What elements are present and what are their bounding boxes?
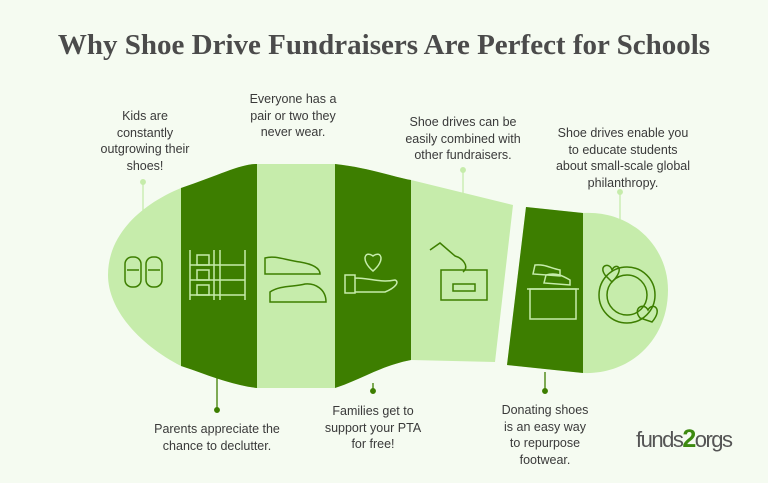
icon: sneakers xyxy=(265,257,326,302)
label: everyone has a pair xyxy=(250,92,336,139)
label: kids outgrowing: Kids are xyxy=(122,109,168,123)
label: combined fundraisers: other fundraisers. xyxy=(414,148,512,162)
shoe sole graphic xyxy=(108,164,668,413)
label: educate students: Shoe drives enable you xyxy=(558,126,688,140)
title: Why Shoe Drive Fundraisers Are Perfect for Schools xyxy=(58,29,710,61)
label: families support PTA: Families get to xyxy=(332,404,414,418)
label: educate students xyxy=(556,126,690,190)
label: parents declutter: Parents appreciate the xyxy=(154,422,280,436)
label: combined fundraisers xyxy=(405,115,521,162)
label: families support PTA: support your PTA xyxy=(325,420,421,434)
label: educate students: about small-scale global xyxy=(556,159,690,173)
label: donating shoes: footwear. xyxy=(520,452,570,466)
label: everyone has a pair: pair or two they xyxy=(250,108,336,122)
icon: globe with hearts xyxy=(599,265,657,323)
label: kids outgrowing: outgrowing their xyxy=(101,142,189,156)
label: donating shoes: is an easy way xyxy=(504,420,586,434)
label: combined fundraisers: easily combined with xyxy=(405,132,521,146)
icon: hand with heart xyxy=(345,254,397,293)
label: parents declutter xyxy=(154,422,280,452)
logo: funds2orgs xyxy=(636,425,732,453)
label: kids outgrowing: shoes! xyxy=(127,158,163,172)
label: kids outgrowing xyxy=(101,109,190,172)
label: parents declutter: chance to declutter. xyxy=(163,438,271,452)
label: donating shoes: to repurpose xyxy=(510,436,580,450)
label: everyone has a pair: Everyone has a xyxy=(250,92,336,106)
label: kids outgrowing: constantly xyxy=(117,126,173,140)
label: donating shoes: Donating shoes xyxy=(502,403,588,417)
label: combined fundraisers: Shoe drives can be xyxy=(409,115,516,129)
label: families support PTA: for free! xyxy=(351,437,395,451)
label: educate students: to educate students xyxy=(568,142,678,156)
label: educate students: philanthropy. xyxy=(588,176,658,190)
icon: donation box xyxy=(430,243,487,300)
label: everyone has a pair: never wear. xyxy=(261,125,325,139)
icon: shoes in box xyxy=(527,265,579,319)
icon: shelves xyxy=(190,250,245,300)
connectors xyxy=(141,164,622,220)
label: families support PTA xyxy=(325,404,422,451)
label: donating shoes xyxy=(502,403,588,466)
icon: baby shoes xyxy=(125,257,162,287)
